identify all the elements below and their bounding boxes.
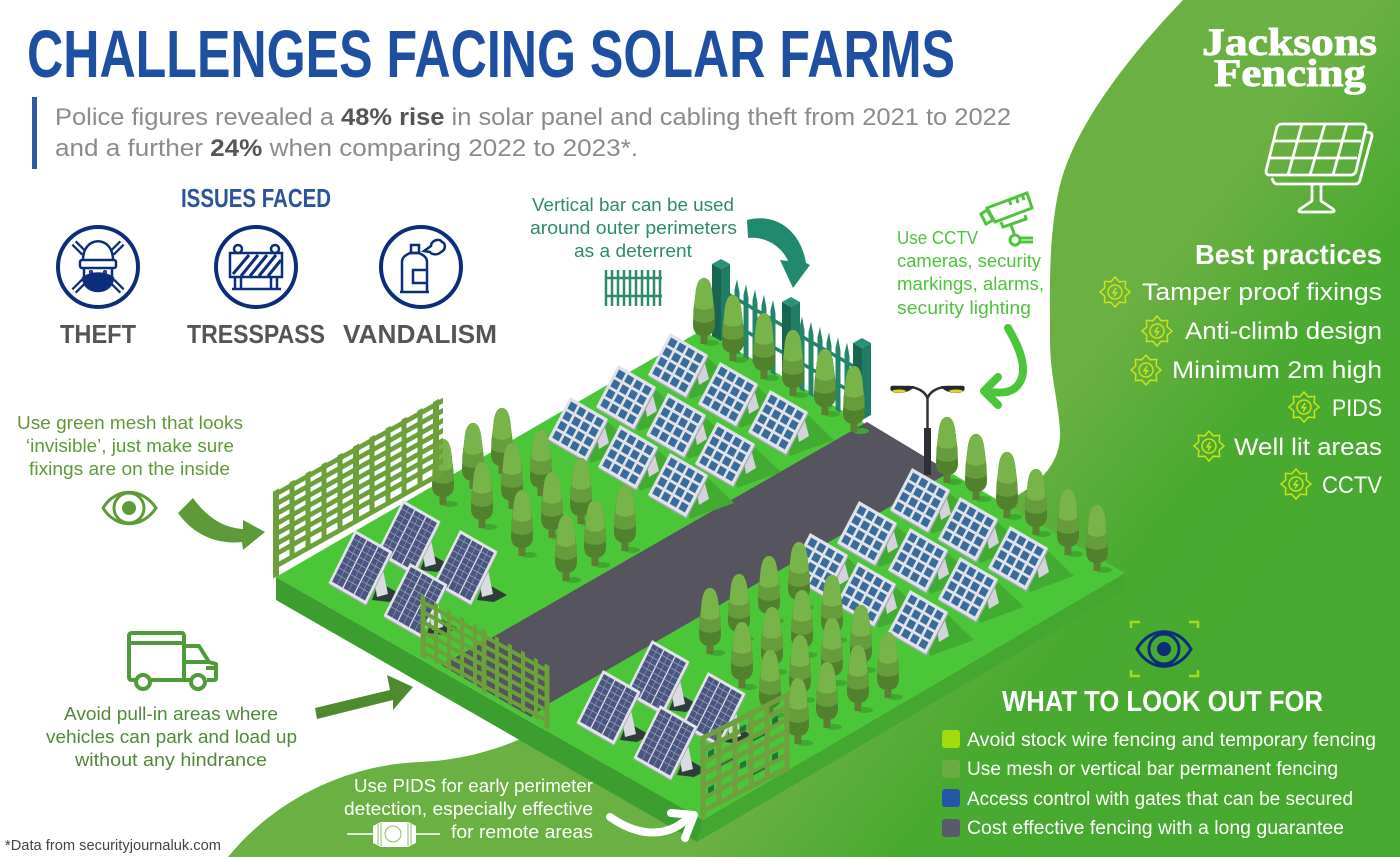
label: vandalism: VANDALISM — [343, 319, 497, 349]
platform — [276, 330, 1125, 842]
trees: back row — [693, 278, 869, 434]
arrow: to gate — [315, 675, 413, 719]
item: well lit areas: Well lit areas — [1234, 434, 1382, 461]
callout: vertical bar: around outer perimeters — [530, 217, 737, 238]
item: PIDS: PIDS — [1332, 395, 1382, 422]
label: theft: THEFT — [60, 319, 136, 349]
heading: best practices: Best practices — [1195, 239, 1382, 270]
heading: what to look out for: WHAT TO LOOK OUT FOR — [1002, 686, 1323, 718]
road — [441, 422, 950, 717]
callout: CCTV — [897, 228, 1044, 318]
icon: eye with focus brackets — [1131, 622, 1198, 676]
callout: green mesh — [17, 412, 243, 479]
callout: pull-in areas: Avoid pull-in areas where — [64, 703, 278, 724]
callout: vertical bar — [530, 194, 737, 261]
callout: PIDS: detection, especially effective — [344, 798, 593, 819]
callout: vertical bar: as a deterrent — [574, 240, 692, 261]
logo: Fencing — [1214, 52, 1367, 95]
solar panels: left group — [328, 500, 507, 639]
trees: front cluster — [699, 542, 903, 746]
icon: trespass barrier — [216, 227, 296, 307]
heading: issues faced: ISSUES FACED — [181, 183, 331, 213]
arrow: to lamp — [984, 328, 1023, 405]
callout: pull-in areas: vehicles can park and load up — [46, 726, 297, 747]
item: well lit areas — [1194, 431, 1382, 461]
callout: pull-in areas: without any hindrance — [74, 749, 267, 770]
callout: PIDS: for remote areas — [451, 821, 593, 842]
item: use mesh: Use mesh or vertical bar permanent fencing — [967, 759, 1338, 780]
icon: CCTV camera — [981, 193, 1033, 245]
fence: green mesh — [276, 396, 443, 577]
title: CHALLENGES FACING SOLAR FARMS — [27, 17, 955, 92]
item: minimum 2m high: Minimum 2m high — [1172, 357, 1382, 384]
callout: PIDS: Use PIDS for early perimeter — [354, 775, 593, 796]
intro statement: Police figures revealed a 48% rise in solar panel and cabling theft from 2021 to 2022 — [55, 104, 1011, 131]
solar panels: right group — [787, 468, 1074, 656]
panel: best practices — [1100, 239, 1383, 499]
icon: eye — [103, 492, 156, 524]
PIDS sensors — [708, 708, 778, 798]
callout: green mesh: Use green mesh that looks — [17, 412, 243, 433]
arrow: to PIDS fence — [610, 813, 694, 838]
intro statement — [32, 97, 1011, 169]
panel: issues faced — [58, 183, 497, 349]
item: PIDS — [1289, 392, 1382, 422]
item: minimum 2m high — [1131, 355, 1382, 385]
item: avoid stock wire: Avoid stock wire fencing and temporary fencing — [967, 730, 1376, 751]
callout: PIDS — [344, 775, 593, 842]
callout: green mesh: ‘invisible’, just make sure — [26, 435, 234, 456]
item: CCTV: CCTV — [1322, 472, 1383, 499]
callout: CCTV: markings, alarms, — [897, 274, 1044, 294]
lamp post — [890, 386, 965, 475]
gate: mesh left leaf — [423, 596, 484, 694]
solar panels: back group — [547, 333, 834, 519]
arrow: to vertical bar fence — [747, 218, 810, 288]
icon: vertical bar fence — [605, 270, 662, 306]
trees: right row — [936, 417, 1112, 573]
callout: CCTV: cameras, security — [897, 251, 1041, 271]
logo — [1202, 21, 1377, 95]
logo: Jacksons — [1202, 21, 1377, 64]
gate: mesh right leaf — [484, 630, 547, 729]
item: cost effective: Cost effective fencing with a long guarantee — [967, 818, 1344, 839]
icon: vandalism spray can — [381, 227, 461, 307]
trees: left cluster — [432, 408, 640, 583]
item: anti-climb design — [1142, 316, 1382, 346]
icon: truck — [129, 633, 216, 689]
callout: CCTV: Use CCTV — [897, 228, 978, 248]
callout: green mesh: fixings are on the inside — [29, 458, 230, 479]
item: CCTV — [1281, 469, 1383, 499]
item: anti-climb design: Anti-climb design — [1185, 318, 1382, 345]
icon: theft — [58, 227, 138, 307]
callout: CCTV: security lighting — [897, 298, 1031, 318]
icon: solar panel — [1266, 124, 1372, 212]
solar farm illustration — [276, 259, 1125, 842]
callout: vertical bar: Vertical bar can be used — [532, 194, 734, 215]
panel: what to look out for — [942, 686, 1376, 839]
item: access control: Access control with gates that can be secured — [967, 789, 1353, 810]
fence: mesh with PIDS sensors — [703, 692, 787, 819]
arrow: to mesh fence — [178, 498, 265, 550]
fence: vertical bar — [712, 259, 871, 424]
footnote: *Data from securityjournaluk.com — [5, 837, 221, 854]
callout: pull-in areas — [46, 703, 297, 770]
solar panels: front group — [576, 640, 755, 781]
icon: PIDS sensor — [347, 822, 440, 847]
intro statement: and a further 24% when comparing 2022 to 2023*. — [55, 135, 638, 162]
item: tamper proof fixings: Tamper proof fixings — [1142, 279, 1382, 306]
label: trespass: TRESSPASS — [187, 319, 325, 349]
